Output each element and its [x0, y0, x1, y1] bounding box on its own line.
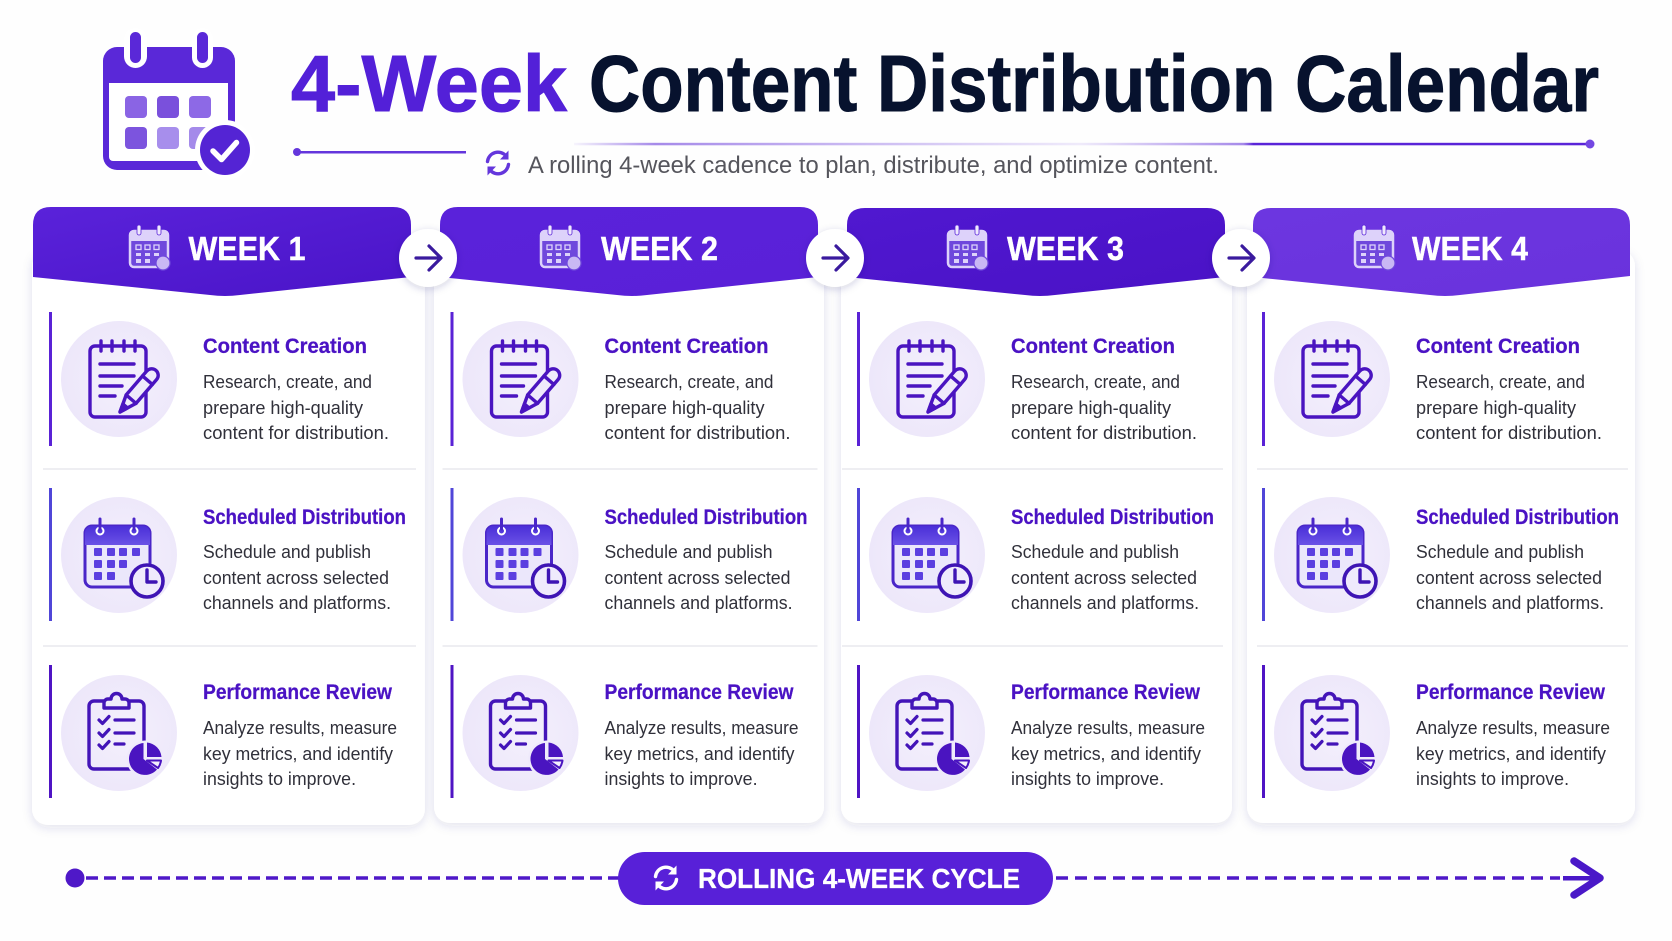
row: scheduled distribution: channels and platforms.	[203, 592, 391, 613]
row: scheduled distribution: Scheduled Distribution	[203, 506, 406, 529]
rows: week 4 activities: Performance Review	[1416, 681, 1606, 704]
rows: week 4 activities: insights to improve.	[1416, 768, 1569, 789]
icon: main calendar with check badge	[103, 28, 255, 180]
row: performance review: Performance Review	[203, 681, 393, 704]
rows: week 2 activities: prepare high-quality	[604, 397, 765, 418]
row: content creation: Content Creation	[203, 335, 367, 358]
title: 4-Week	[291, 39, 568, 128]
rows: week 3 activities: content for distribution.	[1011, 422, 1197, 443]
rows: week 2 activities: channels and platforms.	[604, 592, 792, 613]
rows: week 2 activities	[442, 312, 818, 798]
row: content creation	[49, 312, 389, 446]
rows: week 4 activities: content across selected	[1416, 567, 1602, 588]
rows: week 3 activities: Content Creation	[1011, 335, 1175, 358]
row: content creation: prepare high-quality	[203, 397, 364, 418]
rows: week 4 activities: prepare high-quality	[1416, 397, 1577, 418]
rows: week 3 activities: channels and platforms.	[1011, 592, 1199, 613]
rows: week 2 activities: Schedule and publish	[604, 541, 772, 562]
panel: week 3: WEEK 3	[1007, 230, 1124, 267]
panel: week 4: WEEK 4	[1412, 230, 1529, 267]
rows: week 3 activities: key metrics, and identify	[1011, 743, 1202, 764]
arrow: week 1 to week 2	[399, 229, 457, 287]
panel: week 1: WEEK 1	[188, 230, 306, 267]
rows: week 4 activities: Schedule and publish	[1416, 541, 1584, 562]
rows: week 3 activities: Analyze results, measure	[1011, 717, 1205, 738]
row: scheduled distribution: Schedule and publish	[203, 541, 371, 562]
row: content creation: Research, create, and	[203, 371, 372, 392]
rows: week 4 activities	[1257, 312, 1628, 798]
rows: week 3 activities: Performance Review	[1011, 681, 1201, 704]
rows: week 2 activities: content for distribution.	[604, 422, 790, 443]
panel: week 2: WEEK 2	[601, 230, 718, 267]
rows: week 3 activities: Research, create, and	[1011, 371, 1180, 392]
rows: week 3 activities: content across selected	[1011, 567, 1197, 588]
rows: week 3 activities: prepare high-quality	[1011, 397, 1172, 418]
rows: week 4 activities: Analyze results, measure	[1416, 717, 1610, 738]
rows: week 4 activities: Scheduled Distribution	[1416, 506, 1619, 529]
subtitle with rule lines: A rolling 4-week cadence to plan, distribute, and optimize content.	[528, 152, 1219, 179]
rows: week 2 activities: Performance Review	[604, 681, 794, 704]
rows: week 2 activities: insights to improve.	[604, 768, 758, 789]
row: performance review	[49, 665, 397, 798]
rows: week 3 activities: Schedule and publish	[1011, 541, 1179, 562]
rows: week 2 activities: Content Creation	[604, 335, 768, 358]
rows: week 2 activities: Analyze results, measure	[604, 717, 798, 738]
arrow: week 3 to week 4	[1212, 229, 1270, 287]
rows: week 2 activities: key metrics, and identify	[604, 743, 795, 764]
rows: week 4 activities: content for distribution.	[1416, 422, 1602, 443]
rows: week 4 activities: key metrics, and identify	[1416, 743, 1607, 764]
row: content creation: content for distribution.	[203, 422, 389, 443]
rows: week 4 activities: Research, create, and	[1416, 371, 1585, 392]
rows: week 2 activities: Research, create, and	[604, 371, 774, 392]
timeline: rolling cycle: ROLLING 4-WEEK CYCLE	[698, 863, 1020, 894]
subtitle with rule lines	[293, 140, 1594, 179]
rows: week 4 activities: Content Creation	[1416, 335, 1580, 358]
panel: week 4	[1247, 208, 1635, 823]
rows: week 2 activities: Scheduled Distribution	[604, 506, 808, 529]
row: scheduled distribution	[49, 488, 406, 621]
rows: week 3 activities	[842, 312, 1223, 798]
row: performance review: key metrics, and identify	[203, 743, 394, 764]
rows: week 3 activities: insights to improve.	[1011, 768, 1164, 789]
timeline: rolling cycle	[66, 852, 1600, 905]
panel: week 3	[841, 208, 1232, 823]
row: scheduled distribution: content across selected	[203, 567, 389, 588]
row: performance review: Analyze results, measure	[203, 717, 397, 738]
rows: week 4 activities: channels and platforms.	[1416, 592, 1604, 613]
panel: week 1	[32, 207, 425, 825]
rows: week 2 activities: content across selected	[604, 567, 790, 588]
rows: week 3 activities: Scheduled Distribution	[1011, 506, 1214, 529]
arrow: week 2 to week 3	[806, 229, 864, 287]
row: performance review: insights to improve.	[203, 768, 356, 789]
panel: week 2	[434, 207, 824, 823]
